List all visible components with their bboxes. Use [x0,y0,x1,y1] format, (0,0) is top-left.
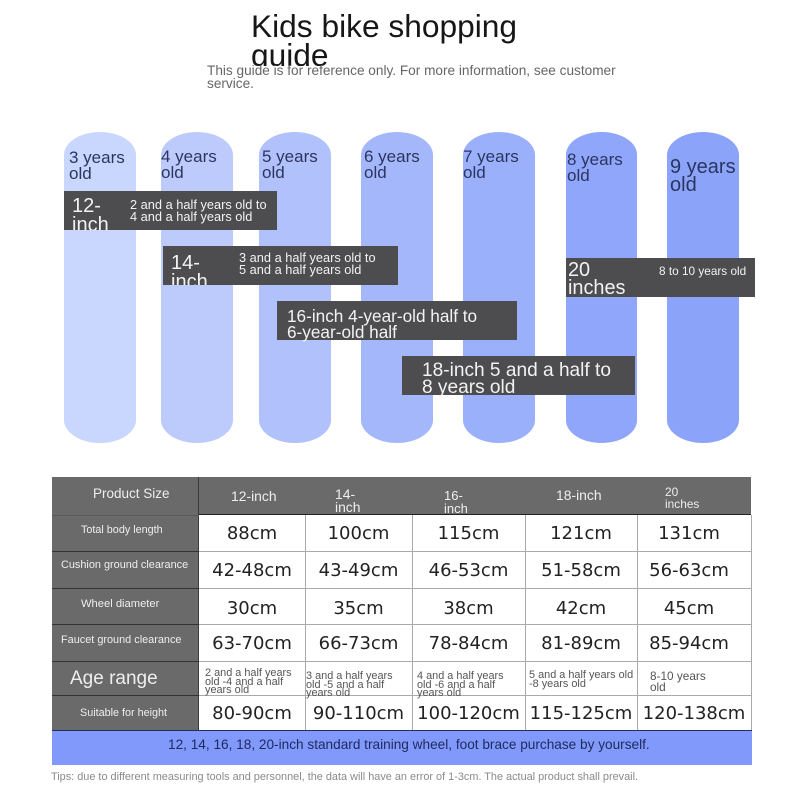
row: faucet ground clearance [61,633,729,654]
tips footnote: Tips: due to different measuring tools and personnel, the data will have an error of 1-3cm. The actual product shall prevail. [51,771,638,783]
header labels [93,485,699,516]
header labels: 16- [444,488,463,503]
age column: 4 years [161,132,233,443]
title [251,12,517,66]
age column: 8 years: 8 years [567,150,623,169]
subtitle: service. [207,76,254,91]
age column: 4 years: 4 years [161,147,217,166]
row: faucet ground clearance: Faucet ground clearance [61,634,181,646]
row: wheel diameter: 38cm [443,598,494,619]
size bar: 12-inch [64,191,277,230]
row: cushion ground clearance: 46-53cm [429,560,508,581]
row: wheel diameter: 30cm [227,598,277,619]
row: suitable for height: 100-120cm [417,703,520,724]
header labels: inch [335,499,360,515]
row: wheel diameter: 35cm [333,598,384,619]
row: total body length: 100cm [328,523,389,544]
size bar: 20 inches: inches [568,276,626,298]
row: cushion ground clearance: 43-49cm [319,560,398,581]
row: age range: 4 and a half years [417,670,504,682]
row: age range: years old [417,687,461,699]
row: age range: years old [205,684,249,696]
age column: 8 years: old [567,166,590,184]
training wheel note band [52,730,752,765]
row: age range: old [650,680,666,694]
subtitle: This guide is for reference only. For more information, see customer [207,63,616,78]
row: age range: years old [306,687,350,699]
row: total body length: Total body length [81,524,163,536]
age column: 5 years [259,132,331,443]
row: suitable for height: 80-90cm [212,703,292,724]
age column: 3 years [64,132,136,443]
row: age range: 3 and a half years [306,670,393,682]
size bar: 16-inch [277,301,517,340]
header labels: inch [444,501,468,516]
header labels: 20 [665,485,678,499]
row: age range [70,667,706,699]
header labels: Product Size [93,486,170,501]
age column: 6 years: 6 years [364,147,420,166]
row: total body length: 131cm [658,523,720,544]
row: cushion ground clearance: Cushion ground clearance [61,559,188,571]
row: suitable for height: 120-138cm [643,703,745,724]
size bar: 20 inches: 20 [568,259,590,281]
subtitle [207,63,616,91]
header labels: 18-inch [556,487,602,503]
size bar: 16-inch: 16-inch 4-year-old half to [287,306,477,326]
row: faucet ground clearance: 78-84cm [429,633,508,654]
age column: 5 years: 5 years [262,147,318,166]
age column: 6 years: old [364,162,387,182]
row: age range: old -6 and a half [417,678,495,690]
age column: 3 years: 3 years [69,148,125,167]
size bar: 12-inch: 4 and a half years old [130,208,252,224]
row: suitable for height: 115-125cm [530,703,632,724]
table header row [199,477,751,515]
size bar: 14-inch: 5 and a half years old [239,262,361,276]
row: suitable for height: 90-110cm [313,703,404,724]
table label column [52,477,199,730]
row: wheel diameter: Wheel diameter [81,598,159,610]
header labels: inches [665,497,699,511]
row: faucet ground clearance: 81-89cm [541,633,621,654]
age column: 9 years: old [670,174,697,196]
row: faucet ground clearance: 85-94cm [649,633,729,654]
age column: 8 years [566,132,637,443]
row: suitable for height [80,703,745,724]
row: cushion ground clearance [61,559,729,581]
size bar: 18-inch: 8 years old [422,377,515,398]
size bar: 18-inch [402,356,635,395]
row: cushion ground clearance: 42-48cm [212,560,292,581]
age column: 7 years: 7 years [463,147,519,166]
row: total body length: 121cm [550,523,612,544]
size bar: 20 inches: 8 to 10 years old [659,264,746,278]
header labels: 12-inch [231,488,277,504]
size bar: 18-inch: 18-inch 5 and a half to [422,360,611,381]
age column: 9 years: 9 years [670,156,736,178]
row: age range: old -5 and a half [306,678,384,690]
age column: 7 years [463,132,535,443]
row: faucet ground clearance: 63-70cm [212,633,292,654]
row: cushion ground clearance: 56-63cm [649,560,729,581]
age column: 5 years: old [262,162,285,182]
size bar: 14-inch: 14- [171,252,200,274]
row: wheel diameter: 42cm [556,598,606,619]
row: age range: Age range [70,668,158,689]
size bar: 14-inch [163,246,398,285]
row: wheel diameter [81,598,714,619]
age column: 9 years [667,132,739,443]
age column: 6 years [361,132,433,443]
size bar: 14-inch: 3 and a half years old to [239,250,376,265]
row: total body length [81,523,720,544]
row: age range: 8-10 years [650,669,706,683]
row: total body length: 88cm [227,523,277,544]
row: faucet ground clearance: 66-73cm [319,633,398,654]
size bar: 20 inches [566,258,755,297]
age column: 3 years: old [69,164,92,182]
row: age range: 2 and a half years [205,667,292,679]
age column: 4 years: old [161,162,184,182]
row: age range: 5 and a half years old [529,669,633,681]
row: suitable for height: Suitable for height [80,707,167,719]
age column: 7 years: old [463,162,486,182]
size table [52,477,752,765]
row: wheel diameter: 45cm [664,598,714,619]
training wheel note band: 12, 14, 16, 18, 20-inch standard training wheel, foot brace purchase by yourself. [168,737,650,752]
row: cushion ground clearance: 51-58cm [541,560,621,581]
row: total body length: 115cm [438,523,499,544]
size bar: 12-inch: 2 and a half years old to [130,197,267,212]
header labels: 14- [335,486,355,502]
size bar: 12-inch: 12- [72,195,101,217]
size bar: 16-inch: 6-year-old half [287,322,397,342]
row: age range: old -4 and a half [205,676,283,688]
row: age range: -8 years old [529,678,586,690]
